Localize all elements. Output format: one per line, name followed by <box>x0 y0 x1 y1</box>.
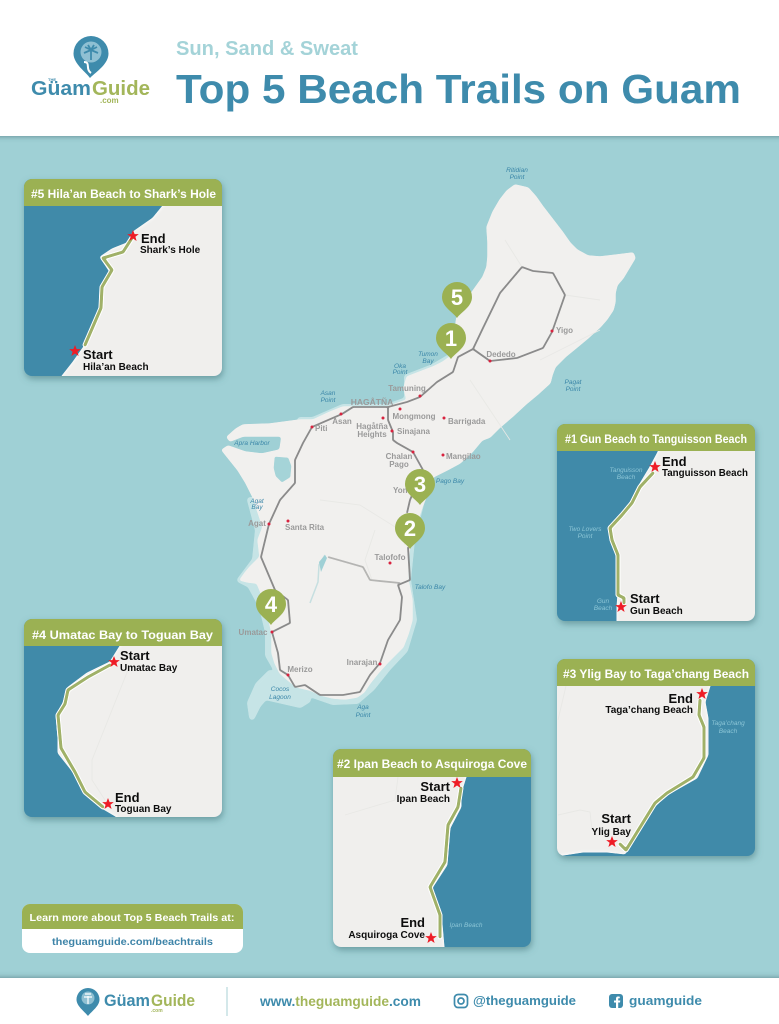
panel: #5 Hila'an Beach to Shark's Hole: Shark’s Hole <box>140 245 201 256</box>
town labels: Mangilao <box>446 452 481 461</box>
panel: #2 Ipan Beach to Asquiroga Cove: Ipan Beach <box>397 794 450 805</box>
panel: #5 Hila'an Beach to Shark's Hole: Start <box>83 347 113 362</box>
town labels: Sinajana <box>397 427 430 436</box>
pin 4 <box>256 589 286 625</box>
panel: #4 Umatac Bay to Toguan Bay: Start <box>120 648 150 663</box>
water labels: Oka <box>394 363 406 370</box>
water labels: Point <box>321 397 337 404</box>
town labels: Talofofo <box>375 553 406 562</box>
facebook handle: guamguide <box>629 993 702 1008</box>
panel: #2 Ipan Beach to Asquiroga Cove: #2 Ipan Beach to Asquiroga Cove <box>337 757 527 771</box>
town markers <box>268 330 554 676</box>
icon: instagram <box>454 994 468 1008</box>
town labels: Tamuning <box>388 384 426 393</box>
panel: #2 Ipan Beach to Asquiroga Cove: Start <box>420 779 451 794</box>
callout: learn more: theguamguide.com/beachtrails <box>52 936 213 948</box>
panel: #2 Ipan Beach to Asquiroga Cove: End <box>400 915 425 930</box>
island landmass <box>222 185 635 699</box>
pin 3: 3 <box>414 472 426 497</box>
logo: Guide <box>92 78 150 100</box>
town labels: Heights <box>357 430 387 439</box>
town labels: Umatac <box>239 628 268 637</box>
panel: #1 Gun Beach to Tanguisson Beach: End <box>662 454 687 469</box>
panel: #3 Ylig Bay to Taga'chang Beach: Beach <box>719 728 738 735</box>
water labels: Point <box>356 712 372 719</box>
inner Apra harbor <box>274 457 291 482</box>
town labels: Dededo <box>486 350 516 359</box>
website: www.theguamguide.com <box>259 994 421 1009</box>
panel: #5 Hila'an Beach to Shark's Hole: Hila’an Beach <box>83 362 149 373</box>
footer logo: .com <box>151 1008 163 1014</box>
pin 1: 1 <box>445 326 457 351</box>
panel: #4 Umatac Bay to Toguan Bay: Toguan Bay <box>115 804 172 815</box>
town labels: Santa Rita <box>285 523 325 532</box>
panel: #3 Ylig Bay to Taga'chang Beach: #3 Ylig Bay to Taga’chang Beach <box>563 667 749 681</box>
panel: #1 Gun Beach to Tanguisson Beach: Beach <box>594 605 613 612</box>
town labels <box>239 326 573 674</box>
town labels: Mongmong <box>392 412 436 421</box>
water labels <box>233 167 583 719</box>
panel: #1 Gun Beach to Tanguisson Beach: Start <box>630 591 660 606</box>
panel: #1 Gun Beach to Tanguisson Beach <box>557 424 767 634</box>
footer logo: Guide <box>151 991 195 1010</box>
water labels: Point <box>393 369 409 376</box>
subtitle: Sun, Sand & Sweat <box>176 38 358 60</box>
town labels: Yona <box>393 486 413 495</box>
water labels: Aga <box>356 704 369 711</box>
water labels: Point <box>510 174 526 181</box>
pin 5: 5 <box>451 285 463 310</box>
panel: #5 Hila'an Beach to Shark's Hole: #5 Hila’an Beach to Shark’s Hole <box>31 187 216 201</box>
logo <box>31 36 150 105</box>
header bar <box>0 0 779 136</box>
panel: #1 Gun Beach to Tanguisson Beach: Point <box>578 533 594 540</box>
water labels: Lagoon <box>269 694 291 701</box>
panel: #1 Gun Beach to Tanguisson Beach: Beach <box>617 474 636 481</box>
water labels: Talofo Bay <box>415 584 446 591</box>
main roads <box>261 267 565 695</box>
instagram handle: @theguamguide <box>473 993 576 1008</box>
water labels: Tumon <box>418 351 438 358</box>
logo: THE <box>48 77 56 82</box>
town labels: Asan <box>332 417 352 426</box>
water labels: Pagat <box>564 379 583 386</box>
panel: #4 Umatac Bay to Toguan Bay: End <box>115 790 140 805</box>
water labels: Apra Harbor <box>233 440 271 447</box>
panel: #4 Umatac Bay to Toguan Bay: #4 Umatac Bay to Toguan Bay <box>32 628 213 642</box>
callout: learn more <box>22 904 243 953</box>
panel: #3 Ylig Bay to Taga'chang Beach: Start <box>601 811 632 826</box>
panel: #1 Gun Beach to Tanguisson Beach: Gun <box>597 598 610 605</box>
panel: #2 Ipan Beach to Asquiroga Cove: Ipan Beach <box>450 922 483 929</box>
town labels: HAGÅTÑA <box>351 397 393 407</box>
footer logo <box>76 988 195 1016</box>
reef shelf around the island <box>240 357 460 717</box>
panel: #2 Ipan Beach to Asquiroga Cove: Asquiroga Cove <box>348 930 425 941</box>
callout: learn more: Learn more about Top 5 Beach Trails at: <box>30 912 234 924</box>
panel: #4 Umatac Bay to Toguan Bay: Umatac Bay <box>120 663 178 674</box>
footer logo: Güam <box>104 991 150 1010</box>
panel: #1 Gun Beach to Tanguisson Beach: Tanguisson Beach <box>662 468 748 479</box>
water labels: Bay <box>251 504 263 511</box>
town labels: Piti <box>315 424 327 433</box>
logo: Güam <box>31 78 91 100</box>
panel: #3 Ylig Bay to Taga'chang Beach: Taga’chang <box>711 720 745 727</box>
map of Guam <box>222 167 635 719</box>
water labels: Point <box>566 386 582 393</box>
water labels: Pago Bay <box>436 478 465 485</box>
panel: #3 Ylig Bay to Taga'chang Beach: Taga’chang Beach <box>605 705 693 716</box>
pin 2 <box>395 513 425 549</box>
town labels: Merizo <box>287 665 313 674</box>
panel: #3 Ylig Bay to Taga'chang Beach: Ylig Bay <box>592 827 631 838</box>
footer bar <box>0 978 779 1024</box>
panel: #1 Gun Beach to Tanguisson Beach: Two Lovers <box>568 526 602 533</box>
water labels: Asan <box>320 390 336 397</box>
title: Top 5 Beach Trails on Guam <box>176 66 741 112</box>
water labels: Cocos <box>271 686 290 693</box>
water labels: Bay <box>422 358 434 365</box>
inland roads <box>320 240 600 580</box>
pin 2: 2 <box>404 516 416 541</box>
town labels: Agat <box>248 519 266 528</box>
town labels: Pago <box>389 460 409 469</box>
icon: facebook <box>609 994 623 1008</box>
panel: #3 Ylig Bay to Taga'chang Beach: End <box>668 691 693 706</box>
logo: .com <box>100 96 119 105</box>
panel: #5 Hila'an Beach to Shark's Hole <box>24 179 234 388</box>
water labels: Ritidian <box>506 167 528 174</box>
panel: #1 Gun Beach to Tanguisson Beach: #1 Gun Beach to Tanguisson Beach <box>565 432 747 446</box>
town labels: Hagåtña <box>356 422 388 431</box>
town labels: Barrigada <box>448 417 486 426</box>
panel: #1 Gun Beach to Tanguisson Beach: Gun Beach <box>630 606 683 617</box>
water labels: Agat <box>249 498 265 505</box>
lake <box>319 555 327 572</box>
panel: #3 Ylig Bay to Taga'chang Beach <box>545 659 755 858</box>
town labels: Inarajan <box>347 658 377 667</box>
pin 3 <box>405 469 435 505</box>
panel: #4 Umatac Bay to Toguan Bay <box>24 619 234 829</box>
pin 1 <box>436 323 466 359</box>
town labels: Yigo <box>556 326 573 335</box>
Talofofo river <box>310 555 325 603</box>
town labels: Chalan <box>386 452 412 461</box>
pin 5 <box>442 282 472 318</box>
panel: #5 Hila'an Beach to Shark's Hole: End <box>141 231 166 246</box>
panel: #2 Ipan Beach to Asquiroga Cove <box>321 749 531 959</box>
pin 4: 4 <box>265 592 278 617</box>
panel: #1 Gun Beach to Tanguisson Beach: Tanguisson <box>609 467 643 474</box>
